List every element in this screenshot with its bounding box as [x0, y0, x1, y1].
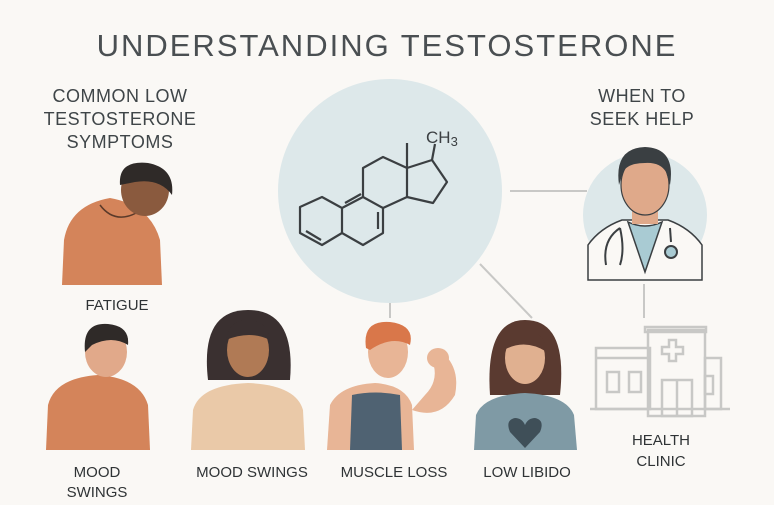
molecule circle	[278, 79, 502, 303]
label: fatigue: FATIGUE	[85, 297, 149, 314]
person: muscle loss	[327, 322, 456, 450]
person: fatigue	[62, 163, 172, 285]
label: health clinic	[632, 432, 690, 470]
person: mood swings left	[46, 324, 150, 450]
connector lines	[390, 191, 644, 318]
icon: health clinic	[590, 327, 730, 416]
heading: when to seek help	[590, 86, 694, 129]
title: UNDERSTANDING TESTOSTERONE	[97, 28, 677, 63]
heading: when to seek help: SEEK HELP	[590, 109, 694, 129]
label: health clinic: HEALTH	[632, 432, 690, 449]
person: low libido	[474, 320, 577, 450]
label: mood swings left: SWINGS	[67, 484, 127, 501]
icon: doctor	[583, 147, 707, 280]
label: mood swings: MOOD SWINGS	[196, 464, 308, 481]
molecule circle: 3	[451, 134, 458, 149]
person: mood swings woman	[191, 310, 305, 450]
heading: common low testosterone symptoms: COMMON LOW	[52, 86, 188, 106]
heading: common low testosterone symptoms: TESTOSTERONE	[44, 109, 196, 129]
heading: common low testosterone symptoms	[44, 86, 196, 152]
label: mood swings left: MOOD	[74, 464, 120, 481]
label: health clinic: CLINIC	[636, 453, 686, 470]
label: low libido: LOW LIBIDO	[483, 464, 571, 481]
molecule circle: CH	[426, 128, 451, 147]
heading: when to seek help: WHEN TO	[598, 86, 686, 106]
heading: common low testosterone symptoms: SYMPTOMS	[67, 132, 173, 152]
label: muscle loss: MUSCLE LOSS	[341, 464, 447, 481]
label: mood swings left	[67, 464, 127, 501]
